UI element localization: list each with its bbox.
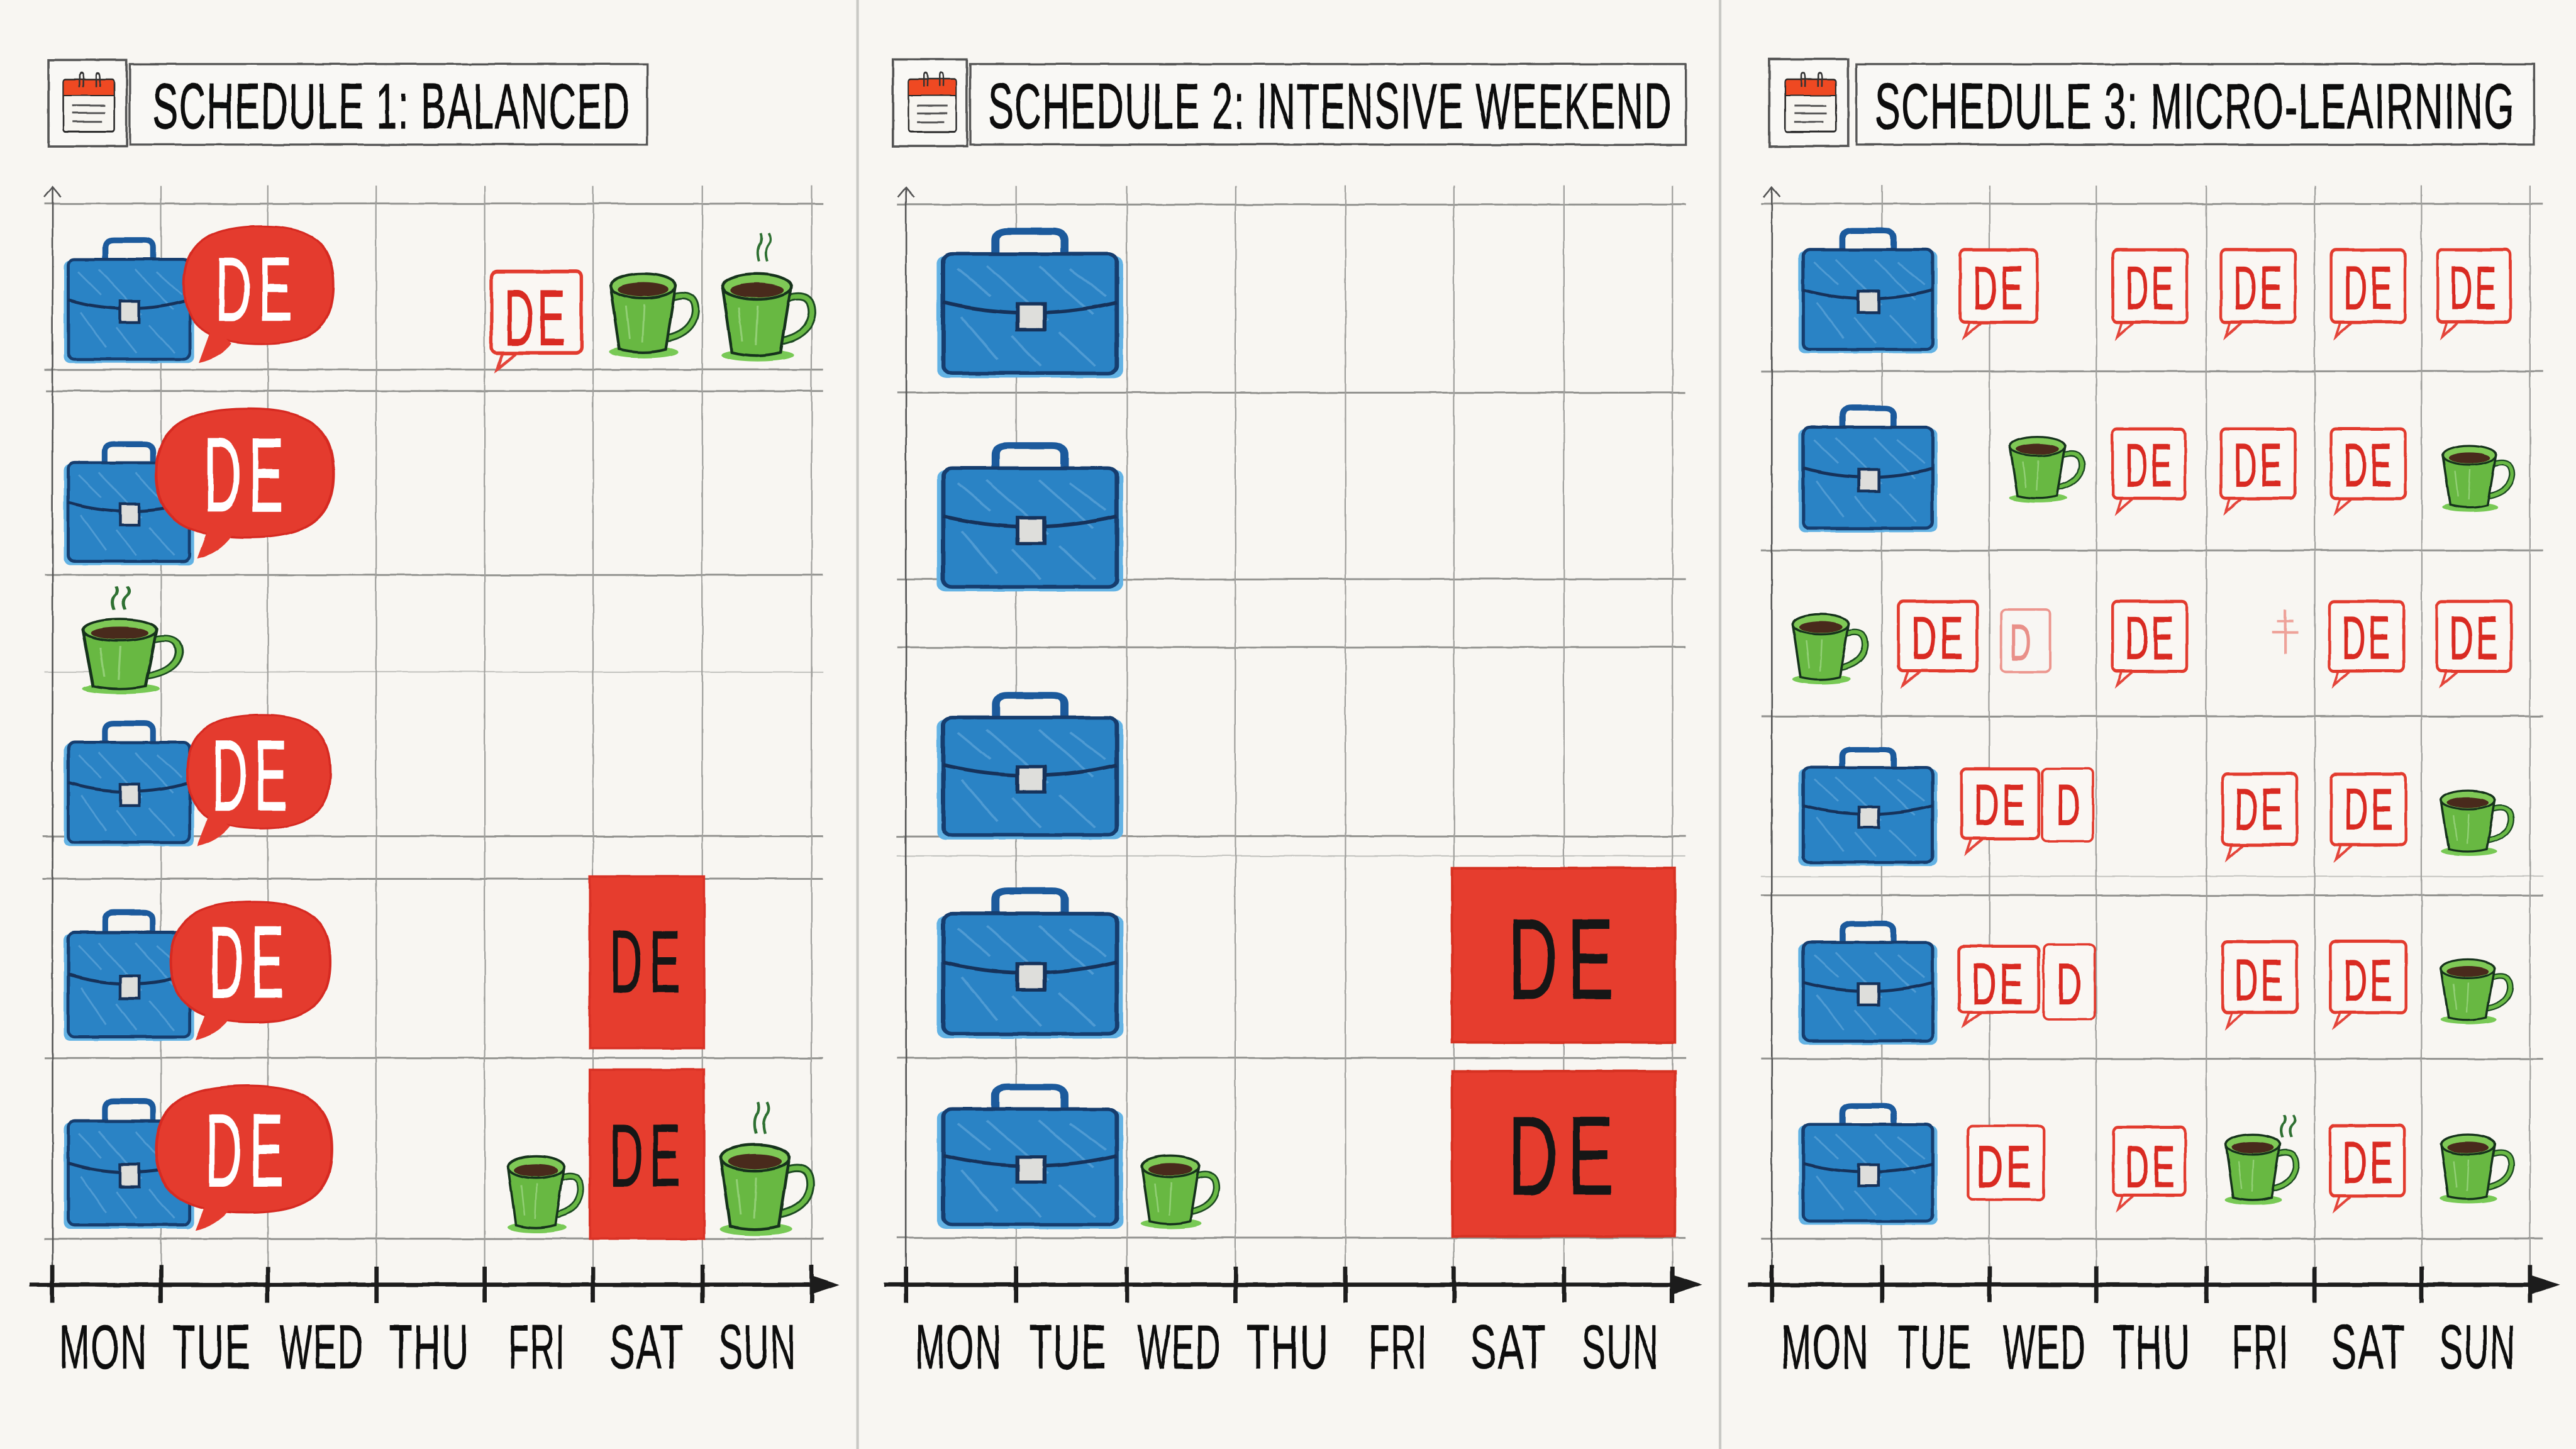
heading: schedule 2 — [893, 59, 1685, 146]
row 3: DE — [2125, 605, 2176, 672]
day labels: SAT — [2331, 1313, 2406, 1382]
y axis arrow — [898, 187, 914, 1278]
row 4: DE — [2345, 776, 2396, 842]
heading: schedule 3 — [1769, 59, 2534, 146]
x axis arrow with day ticks — [30, 1265, 833, 1303]
x axis arrow with day ticks — [1748, 1265, 2553, 1303]
day labels: FRI — [508, 1313, 566, 1382]
panel dividers — [858, 0, 1720, 1449]
row 5: DE — [2235, 947, 2285, 1013]
day labels: MON — [1781, 1313, 1870, 1382]
row 3: steaming coffee mug — [82, 586, 179, 694]
day labels: THU — [1246, 1313, 1329, 1382]
day labels: TUE — [1030, 1313, 1108, 1382]
row 2: work, German bubble — [64, 409, 333, 565]
panel: schedule 2 intensive weekend — [884, 59, 1696, 1382]
row 3 — [1792, 601, 2511, 685]
row 4: DE — [2235, 776, 2285, 842]
row 5: D — [2057, 952, 2084, 1016]
day labels: TUE — [172, 1313, 252, 1382]
row 6: DE — [1977, 1133, 2034, 1199]
row 6: work, German bubble: DE — [206, 1092, 291, 1208]
row 1: small German bubble: DE — [504, 274, 569, 362]
row 3: DE — [1911, 605, 1966, 672]
day labels: FRI — [2232, 1313, 2289, 1382]
row 3: DE — [2342, 605, 2393, 672]
row 1 — [1799, 231, 2511, 353]
row 5: DE — [2343, 947, 2394, 1013]
icon: briefcase row 5 — [937, 1087, 1123, 1229]
x axis arrow with day ticks — [884, 1267, 1696, 1303]
icon: briefcase row 1 — [937, 231, 1123, 378]
row 6: steaming coffee mug — [720, 1102, 811, 1235]
icon: briefcase row 3 — [937, 696, 1123, 840]
row 1: small German bubble — [491, 272, 581, 369]
day labels: WED — [2002, 1313, 2087, 1382]
day labels — [915, 1313, 1659, 1382]
day labels: SAT — [609, 1313, 684, 1382]
row 4: German weekend block: DE — [1508, 894, 1623, 1023]
row 2: DE — [2233, 432, 2284, 499]
row 6: coffee mug — [508, 1156, 581, 1233]
icon: steaming coffee mug — [721, 233, 812, 362]
row 4: work, German bubble — [64, 715, 330, 846]
day labels: SAT — [1470, 1313, 1546, 1382]
row 1: DE — [1973, 255, 2026, 322]
row 4: German weekend block — [1452, 869, 1675, 1042]
day labels: TUE — [1897, 1313, 1972, 1382]
row 6: work, German bubble — [64, 1085, 332, 1231]
y axis arrow — [45, 187, 61, 1278]
row 6: DE — [2343, 1130, 2396, 1196]
row 1: work, German bubble — [64, 226, 333, 363]
day labels: MON — [915, 1313, 1002, 1382]
chart grid — [43, 186, 823, 1278]
row 5: German block on Saturday — [590, 877, 704, 1048]
row 3: D — [2010, 614, 2034, 671]
row 5: German block on Saturday: DE — [609, 912, 687, 1011]
chart grid — [1761, 186, 2543, 1278]
panel: schedule 1 balanced — [30, 60, 833, 1382]
row 6 — [1799, 1106, 2511, 1224]
row 3: DE — [2450, 605, 2501, 672]
row 1: DE — [2233, 255, 2284, 322]
row 5 — [1799, 924, 2511, 1045]
row 6: DE — [2125, 1133, 2178, 1199]
day labels: SUN — [2440, 1313, 2516, 1382]
day labels: THU — [389, 1313, 470, 1382]
row 5: work, German bubble — [64, 901, 330, 1041]
panel: schedule 3 micro-learning — [1748, 59, 2553, 1382]
row 1: DE — [2450, 255, 2499, 322]
icon: briefcase row 2 — [937, 446, 1123, 591]
row 4: D — [2056, 773, 2083, 837]
row 5: German weekend block: DE — [1508, 1093, 1623, 1218]
heading: schedule 1 — [48, 60, 647, 146]
row 5: DE — [1972, 952, 2026, 1016]
row 5: German weekend block — [1452, 1071, 1675, 1236]
day labels: SUN — [1582, 1313, 1659, 1382]
row 2 — [1799, 408, 2512, 532]
row 1: work, German bubble: DE — [215, 239, 299, 340]
y axis arrow — [1763, 187, 1780, 1278]
row 6: German block on Saturday — [590, 1070, 704, 1239]
row 2: DE — [2125, 432, 2174, 499]
row 1: DE — [2125, 255, 2176, 322]
row 6: German block on Saturday: DE — [609, 1106, 687, 1205]
day labels: THU — [2112, 1313, 2190, 1382]
row 4 — [1799, 750, 2511, 866]
row 4: work, German bubble: DE — [212, 719, 294, 831]
day labels: FRI — [1368, 1313, 1428, 1382]
icon: coffee mug — [609, 274, 696, 358]
row 5: work, German bubble: DE — [209, 906, 291, 1019]
day labels: SUN — [719, 1313, 797, 1382]
day labels — [1781, 1313, 2516, 1382]
day labels: MON — [59, 1313, 148, 1382]
chart grid — [897, 186, 1685, 1278]
heading: schedule 1: SCHEDULE 1: BALANCED — [153, 70, 631, 142]
row 2: DE — [2343, 432, 2394, 499]
day labels: WED — [279, 1313, 364, 1382]
day labels — [59, 1313, 797, 1382]
row 5: coffee mug — [1141, 1155, 1216, 1229]
row 1: DE — [2343, 255, 2394, 322]
day labels: WED — [1138, 1313, 1221, 1382]
icon: briefcase row 4 — [937, 891, 1123, 1038]
row 4: DE — [1974, 773, 2028, 837]
row 2: work, German bubble: DE — [204, 416, 291, 533]
heading: schedule 2: SCHEDULE 2: INTENSIVE WEEKEND — [988, 70, 1672, 142]
